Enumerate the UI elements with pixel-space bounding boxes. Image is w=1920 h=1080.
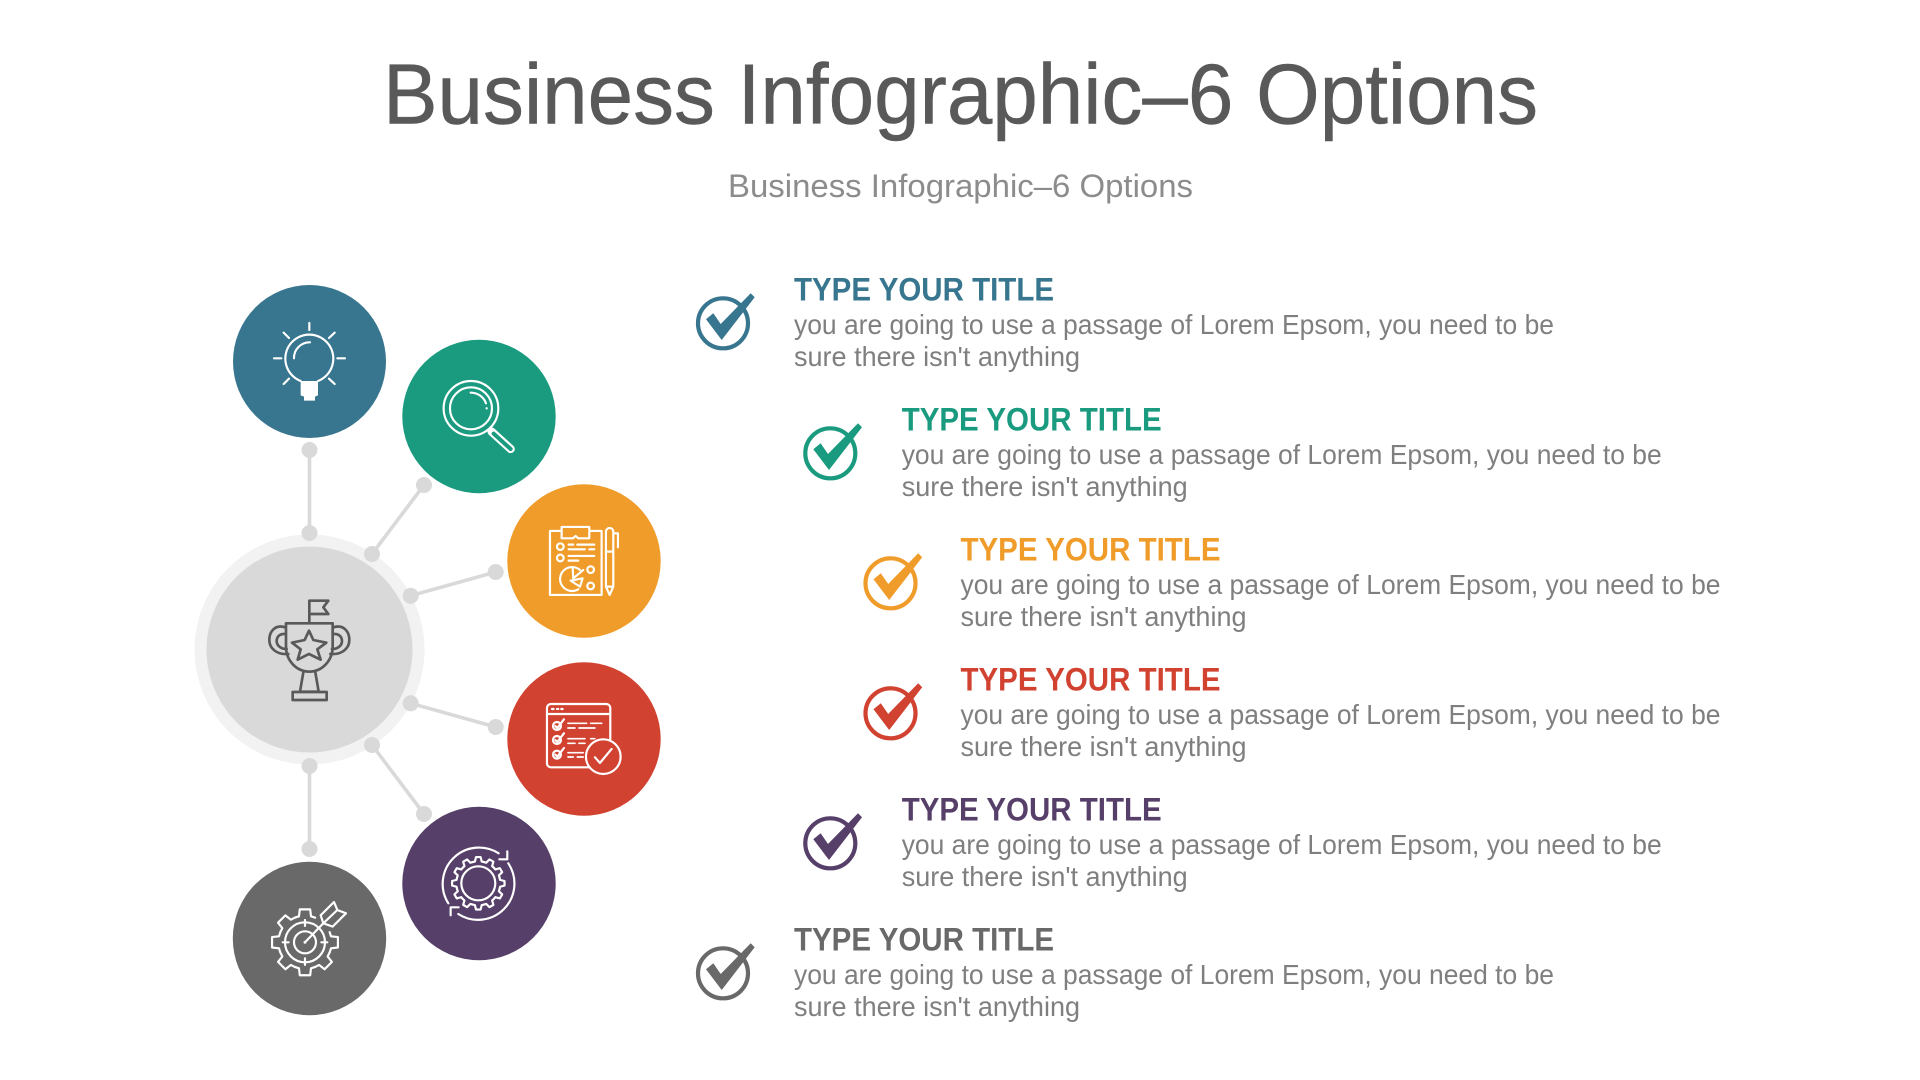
option 4 body: you are going to use a passage of Lorem Epsom, you need to be [960, 699, 1720, 730]
option 5 body: sure there isn't anything [902, 861, 1188, 892]
title: Business Infographic–6 Options [383, 48, 1538, 142]
option 5 [805, 792, 1662, 892]
option 1 [698, 272, 1554, 372]
option 5 heading: TYPE YOUR TITLE [902, 792, 1162, 828]
option 2 [805, 402, 1662, 502]
option 6 body: sure there isn't anything [794, 991, 1080, 1022]
icon: red check [866, 683, 922, 738]
option 2 body: you are going to use a passage of Lorem Epsom, you need to be [902, 439, 1662, 470]
option 2 body: sure there isn't anything [902, 471, 1188, 502]
option 3 [866, 532, 1720, 632]
option 4 body: sure there isn't anything [960, 731, 1246, 762]
option 2 heading: TYPE YOUR TITLE [902, 402, 1162, 438]
option 4 [866, 662, 1720, 762]
option 6 heading: TYPE YOUR TITLE [794, 922, 1054, 958]
hub inner circle [206, 546, 412, 752]
icon: clipboard and pen [550, 527, 618, 595]
circle: green search [402, 340, 556, 493]
hub outer ring [194, 534, 424, 764]
connector dots [302, 442, 504, 857]
option 1 body [794, 309, 1554, 372]
icon: gray check [698, 943, 755, 998]
icon: trophy with flag [269, 601, 349, 700]
option 4 heading: TYPE YOUR TITLE [960, 662, 1220, 698]
icon: green check [805, 423, 862, 478]
diagram: hub and six option circles [194, 285, 661, 1015]
subtitle: Business Infographic–6 Options [728, 168, 1193, 204]
option 5 body [902, 829, 1662, 892]
option 6 body [794, 959, 1554, 1022]
icon: checklist window [547, 704, 621, 774]
icon: magnifying glass [444, 381, 511, 449]
icon: orange check [866, 553, 922, 608]
icon: blue check [698, 293, 755, 348]
option 1 body: sure there isn't anything [794, 341, 1080, 372]
circle: blue idea [233, 285, 386, 438]
circle: gray target [233, 862, 386, 1015]
icon: purple check [805, 813, 862, 868]
icon: gear with circular arrows [443, 848, 514, 920]
icon: light bulb [274, 323, 345, 401]
option 1 body: you are going to use a passage of Lorem Epsom, you need to be [794, 309, 1554, 340]
circle: orange plan [507, 484, 661, 638]
circle: purple process [402, 807, 556, 960]
option 3 heading: TYPE YOUR TITLE [960, 532, 1220, 568]
option 1 heading: TYPE YOUR TITLE [794, 272, 1054, 308]
option 2 body [902, 439, 1662, 502]
option 3 body: sure there isn't anything [960, 601, 1246, 632]
circle: red checklist [507, 662, 661, 816]
option 5 body: you are going to use a passage of Lorem Epsom, you need to be [902, 829, 1662, 860]
option 3 body: you are going to use a passage of Lorem Epsom, you need to be [960, 569, 1720, 600]
icon: gear with arrow target [272, 902, 346, 975]
connectors [310, 450, 496, 849]
option 6 [698, 922, 1554, 1022]
option 4 body [960, 699, 1720, 762]
option 3 body [960, 569, 1720, 632]
option 6 body: you are going to use a passage of Lorem Epsom, you need to be [794, 959, 1554, 990]
